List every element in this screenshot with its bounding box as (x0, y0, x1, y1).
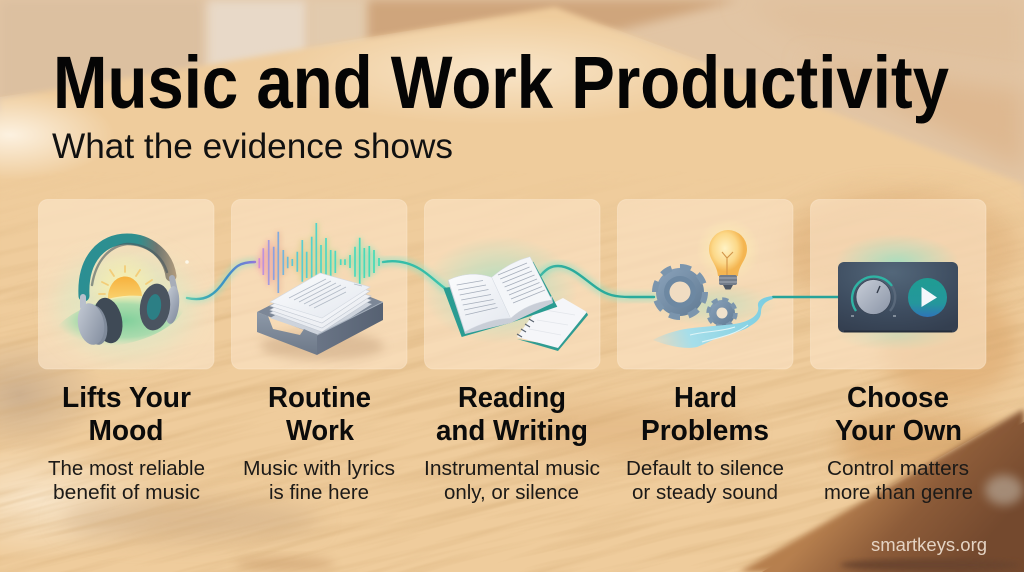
icon: audio waveform (259, 223, 379, 293)
paper stack (270, 273, 372, 336)
item 2 description (243, 458, 395, 504)
book cover (443, 262, 557, 337)
notebook (517, 298, 588, 351)
item 3 description: Instrumental music (424, 458, 600, 480)
panel: card 4 background (618, 200, 793, 369)
icon: sun (108, 276, 142, 299)
icon: green hill (56, 295, 189, 346)
panel: card 5 background (810, 200, 986, 369)
connecting sound wave line (187, 261, 840, 299)
backdrop wall (0, 0, 1024, 170)
item 2 heading (268, 382, 371, 447)
site credit: smartkeys.org (871, 535, 987, 555)
item 2 description: Music with lyrics (243, 458, 395, 480)
panel: card 2 background (232, 200, 407, 369)
item 2 heading: Routine (268, 382, 371, 414)
panel: card 1 background (38, 200, 214, 369)
book left page (448, 274, 511, 332)
item 4 description (626, 458, 784, 504)
item 5 description: Control matters (827, 458, 969, 480)
tray back and inside (257, 278, 383, 335)
item 1 heading: Lifts Your (62, 382, 191, 414)
icon: gears, light bulb and stream (653, 218, 777, 348)
panel: card 3 background (424, 200, 600, 369)
item 3 description: only, or silence (444, 482, 579, 504)
item 2 description: is fine here (269, 482, 369, 504)
stream (653, 296, 773, 348)
item 5 description: more than genre (824, 482, 973, 504)
item 5 description (824, 458, 973, 504)
item 4 heading (641, 382, 769, 447)
item 1 heading (62, 382, 191, 447)
item 3 description (424, 458, 600, 504)
item 5 heading (835, 382, 962, 447)
tray right wall (317, 302, 383, 355)
page block thickness (448, 282, 553, 334)
item 5 heading: Your Own (835, 415, 962, 447)
icon: right ear cup (137, 282, 181, 332)
item 2 heading: Work (286, 415, 355, 447)
icon: headphones with sunrise (56, 239, 193, 355)
small gear (708, 300, 736, 326)
tray front wall (257, 312, 317, 355)
subtitle: What the evidence shows (52, 127, 453, 166)
light bulb (696, 218, 760, 290)
icon: headband (83, 239, 175, 307)
item 4 description: Default to silence (626, 458, 784, 480)
item 1 description: The most reliable (48, 458, 205, 480)
book right page (492, 257, 552, 318)
item 4 description: or steady sound (632, 482, 778, 504)
dark floor corner (739, 409, 1024, 572)
icon: left ear cup (75, 295, 126, 347)
large gear (655, 267, 705, 317)
item 3 heading (436, 382, 588, 447)
item 5 heading: Choose (847, 382, 949, 414)
item 1 heading: Mood (88, 415, 164, 447)
item 3 heading: Reading (458, 382, 566, 414)
item 1 description: benefit of music (53, 482, 200, 504)
item 1 description (48, 458, 205, 504)
icon: open book and notebook (422, 236, 588, 351)
item 3 heading: and Writing (436, 415, 588, 447)
volume knob (851, 277, 896, 316)
icon: audio control panel (835, 234, 959, 351)
item 4 heading: Hard (674, 382, 737, 414)
icon: sun rays (99, 266, 152, 294)
item 4 heading: Problems (641, 415, 769, 447)
icon: document tray (257, 273, 384, 360)
play button (908, 278, 947, 317)
